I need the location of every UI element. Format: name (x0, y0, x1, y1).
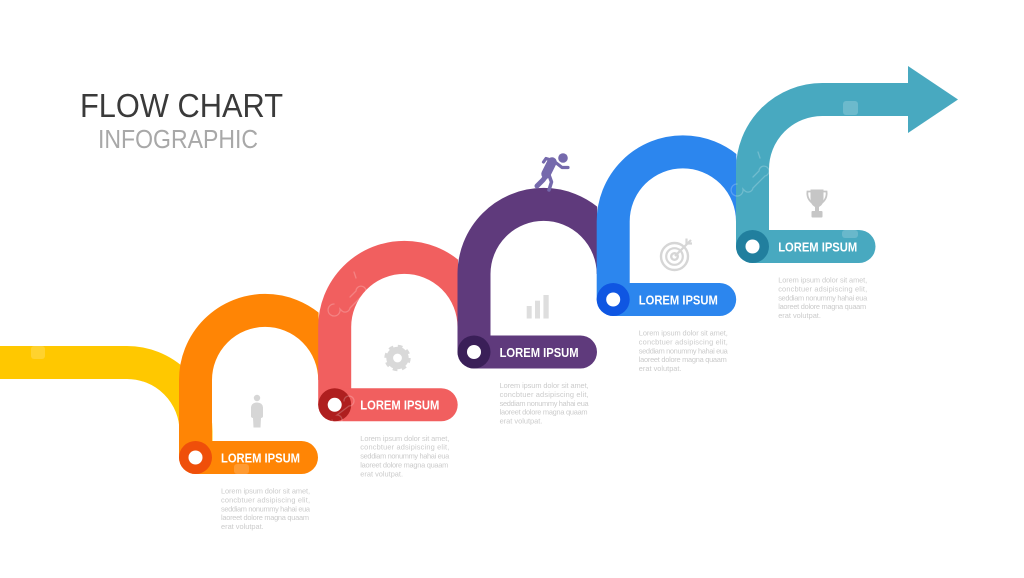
purple label: LOREM IPSUM (500, 345, 579, 360)
red description: laoreet dolore magna quaam (360, 460, 448, 470)
icon: gear (386, 347, 409, 369)
blue description: concbtuer adsipiscing elit, (639, 337, 728, 346)
orange arch (196, 310, 335, 458)
orange node (179, 441, 212, 474)
blue description: seddiam nonummy hahai eua (639, 346, 729, 355)
blue description: laoreet dolore magna quaam (639, 355, 727, 364)
icon: runner (537, 153, 568, 190)
teal description (778, 276, 868, 320)
orange description: erat volutpat. (221, 522, 264, 531)
orange label: LOREM IPSUM (221, 450, 300, 465)
red description: concbtuer adsipiscing elit, (360, 443, 449, 452)
red arch (335, 257, 474, 405)
title: INFOGRAPHIC (98, 124, 258, 154)
purple description (500, 381, 589, 426)
red description: seddiam nonummy hahai eua (360, 452, 450, 461)
icon: trophy (807, 190, 827, 218)
orange description: Lorem ipsum dolor sit amet, (221, 486, 310, 496)
title (80, 88, 283, 154)
icon: bar chart (527, 295, 549, 318)
purple description: erat volutpat. (500, 417, 542, 426)
blue description: Lorem ipsum dolor sit amet, (639, 328, 728, 338)
purple description: Lorem ipsum dolor sit amet, (500, 381, 589, 390)
purple node (458, 336, 490, 368)
teal label: LOREM IPSUM (778, 239, 857, 254)
orange description: seddiam nonummy hahai eua (221, 504, 311, 513)
red description: erat volutpat. (360, 469, 403, 478)
orange description: concbtuer adsipiscing elit, (221, 495, 310, 504)
purple label pill (458, 336, 597, 368)
red label: LOREM IPSUM (360, 398, 439, 413)
red label pill (318, 388, 458, 421)
purple description: concbtuer adsipiscing elit, (500, 390, 589, 399)
orange label pill (179, 441, 318, 474)
blue label pill (597, 283, 736, 316)
purple arch (474, 204, 613, 352)
purple description: laoreet dolore magna quaam (500, 408, 588, 417)
step 5: teal arrow (736, 66, 958, 320)
teal description: concbtuer adsipiscing elit, (778, 284, 867, 293)
teal description: erat volutpat. (778, 311, 821, 320)
teal description: Lorem ipsum dolor sit amet, (778, 276, 867, 284)
teal label pill (736, 230, 876, 263)
step 1: orange (179, 310, 335, 531)
icon: person (251, 395, 263, 428)
yellow entry path (0, 362, 196, 458)
teal node (736, 230, 769, 263)
blue node (597, 283, 630, 316)
orange description (221, 486, 311, 531)
teal description: seddiam nonummy hahai eua (778, 293, 868, 302)
blue description (639, 328, 729, 373)
blue arch (613, 152, 752, 300)
red description (360, 434, 450, 478)
red description: Lorem ipsum dolor sit amet, (360, 434, 449, 443)
teal arrow path (752, 100, 910, 247)
step 3: purple (458, 153, 598, 425)
icon: target (661, 238, 692, 270)
step 4: blue (597, 152, 752, 373)
title: FLOW CHART (80, 88, 283, 125)
step 2: red (318, 257, 474, 478)
blue label: LOREM IPSUM (639, 292, 718, 307)
arrow head (908, 66, 958, 133)
purple description: seddiam nonummy hahai eua (500, 399, 589, 408)
orange description: laoreet dolore magna quaam (221, 513, 309, 522)
blue description: erat volutpat. (639, 364, 682, 373)
red node (318, 388, 351, 421)
teal description: laoreet dolore magna quaam (778, 302, 866, 311)
